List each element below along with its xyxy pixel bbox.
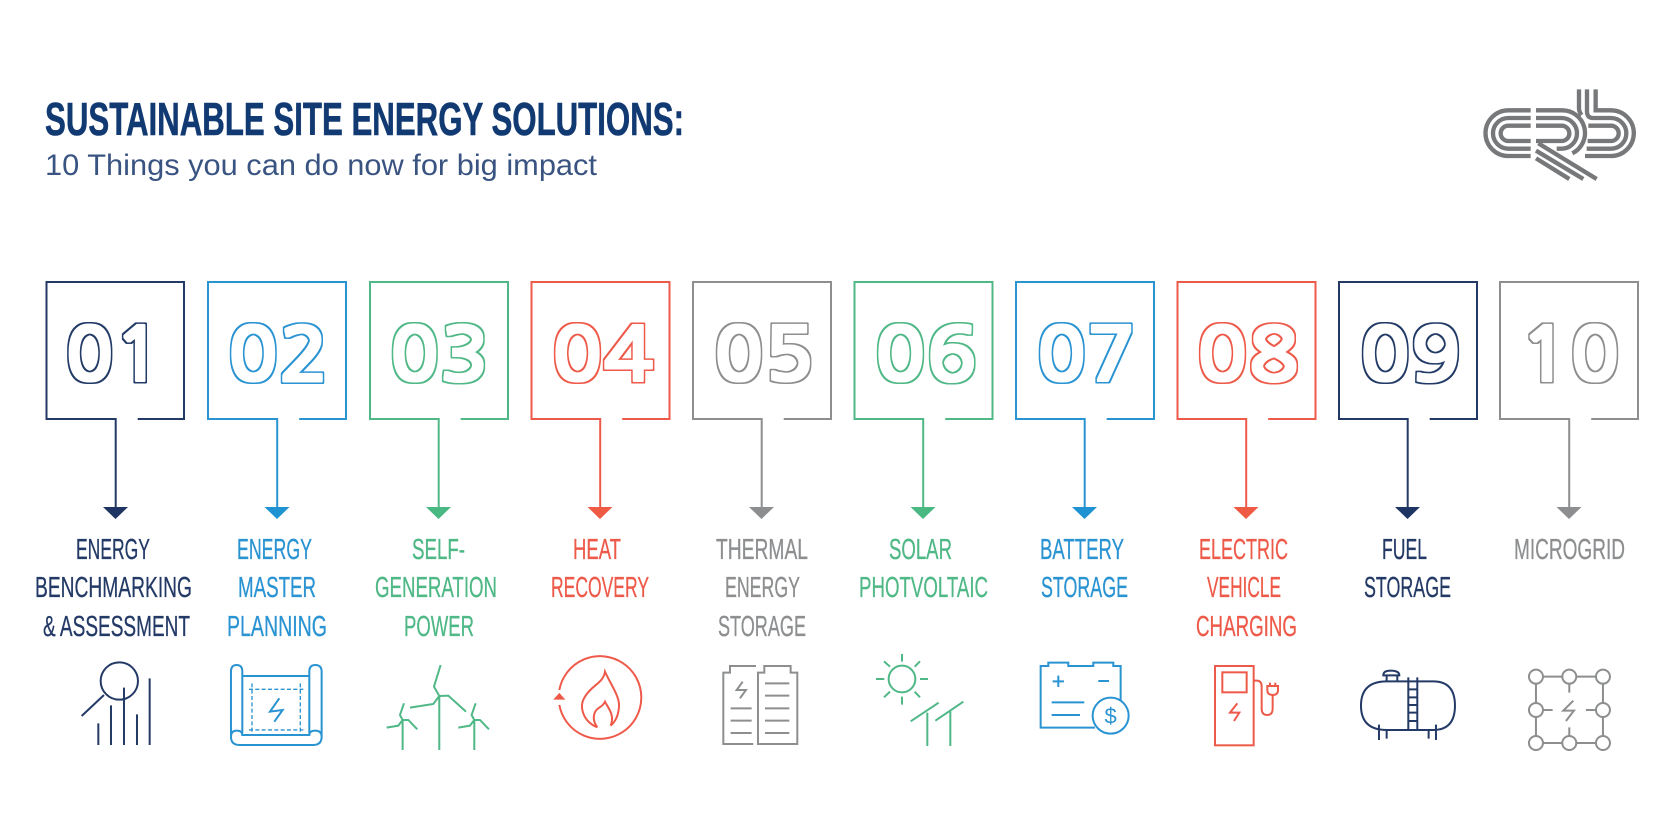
label 02: MASTER (238, 572, 316, 604)
label 08: ELECTRIC (1199, 534, 1288, 566)
icon: microgrid (1529, 670, 1610, 750)
number box 03 with arrow (370, 282, 508, 519)
label 01 (35, 534, 192, 643)
label 02 (227, 534, 327, 643)
number 09: 09 (1360, 320, 1461, 393)
label 04 (551, 534, 649, 604)
label 02: PLANNING (227, 611, 327, 643)
column 06: solar photovoltaic (854, 282, 992, 746)
number box 10 with arrow (1500, 282, 1638, 519)
icon: thermal batteries (723, 666, 797, 744)
label 06: SOLAR (889, 534, 952, 566)
label 04: RECOVERY (551, 572, 649, 604)
icon: fuel tank (1361, 671, 1455, 740)
column 07: battery storage (1016, 282, 1154, 734)
label 03: POWER (404, 611, 474, 643)
number box 07 with arrow (1016, 282, 1154, 519)
number 04: 04 (552, 320, 654, 393)
icon: battery with dollar: $ (1105, 703, 1117, 728)
label 07: BATTERY (1040, 534, 1124, 566)
label 03: GENERATION (375, 572, 497, 604)
icon: magnifier and bars (82, 662, 150, 745)
label 09 (1364, 534, 1451, 604)
label 01: ENERGY (76, 534, 150, 566)
number box 08 with arrow (1178, 282, 1316, 519)
number 05: 05 (714, 320, 814, 393)
number 03: 03 (390, 320, 489, 393)
label 09: STORAGE (1364, 572, 1451, 604)
title: SUSTAINABLE SITE ENERGY SOLUTIONS: (45, 93, 684, 145)
column 03: self-generation power (370, 282, 508, 750)
column 08: electric vehicle charging (1178, 282, 1316, 745)
number box 04 with arrow (532, 282, 670, 519)
number 10: 10 (1520, 320, 1620, 393)
number box 02 with arrow (208, 282, 346, 519)
number box 01 with arrow (46, 282, 184, 519)
label 08: CHARGING (1196, 611, 1297, 643)
subtitle: 10 Things you can do now for big impact (45, 149, 598, 182)
label 01: BENCHMARKING (35, 572, 192, 604)
label 01: & ASSESSMENT (43, 611, 190, 643)
number 02: 02 (228, 320, 329, 393)
icon: flame in recycling circle (554, 656, 641, 739)
label 03 (375, 534, 497, 643)
label 05: ENERGY (725, 572, 800, 604)
icon: wind turbines (387, 665, 489, 750)
label 09: FUEL (1382, 534, 1427, 566)
label 06: PHOTVOLTAIC (859, 572, 988, 604)
icon: blueprint (231, 665, 322, 745)
icon: sun and solar panels (876, 654, 963, 746)
label 07 (1040, 534, 1128, 604)
number 08: 08 (1197, 320, 1299, 393)
label 08: VEHICLE (1207, 572, 1281, 604)
number 07: 07 (1037, 320, 1136, 393)
icon: battery with dollar (1041, 663, 1129, 734)
column 05: thermal energy storage (693, 282, 831, 744)
label 08 (1196, 534, 1297, 643)
number 01: 01 (65, 320, 163, 393)
label 10: MICROGRID (1514, 534, 1625, 566)
label 05: THERMAL (716, 534, 808, 566)
label 07: STORAGE (1041, 572, 1128, 604)
number box 09 with arrow (1339, 282, 1477, 519)
label 03: SELF- (412, 534, 465, 566)
number 06: 06 (875, 320, 977, 393)
column 09: fuel storage (1339, 282, 1477, 740)
logo: CRB (1485, 89, 1634, 179)
column 04: heat recovery (532, 282, 670, 739)
column 10: microgrid (1500, 282, 1638, 750)
column 01: energy benchmarking (35, 282, 192, 745)
number box 06 with arrow (854, 282, 992, 519)
icon: EV charger (1215, 666, 1278, 745)
label 02: ENERGY (237, 534, 312, 566)
label 05 (716, 534, 808, 643)
label 06 (859, 534, 988, 604)
number box 05 with arrow (693, 282, 831, 519)
column 02: energy master planning (208, 282, 346, 745)
label 04: HEAT (573, 534, 621, 566)
label 05: STORAGE (718, 611, 806, 643)
